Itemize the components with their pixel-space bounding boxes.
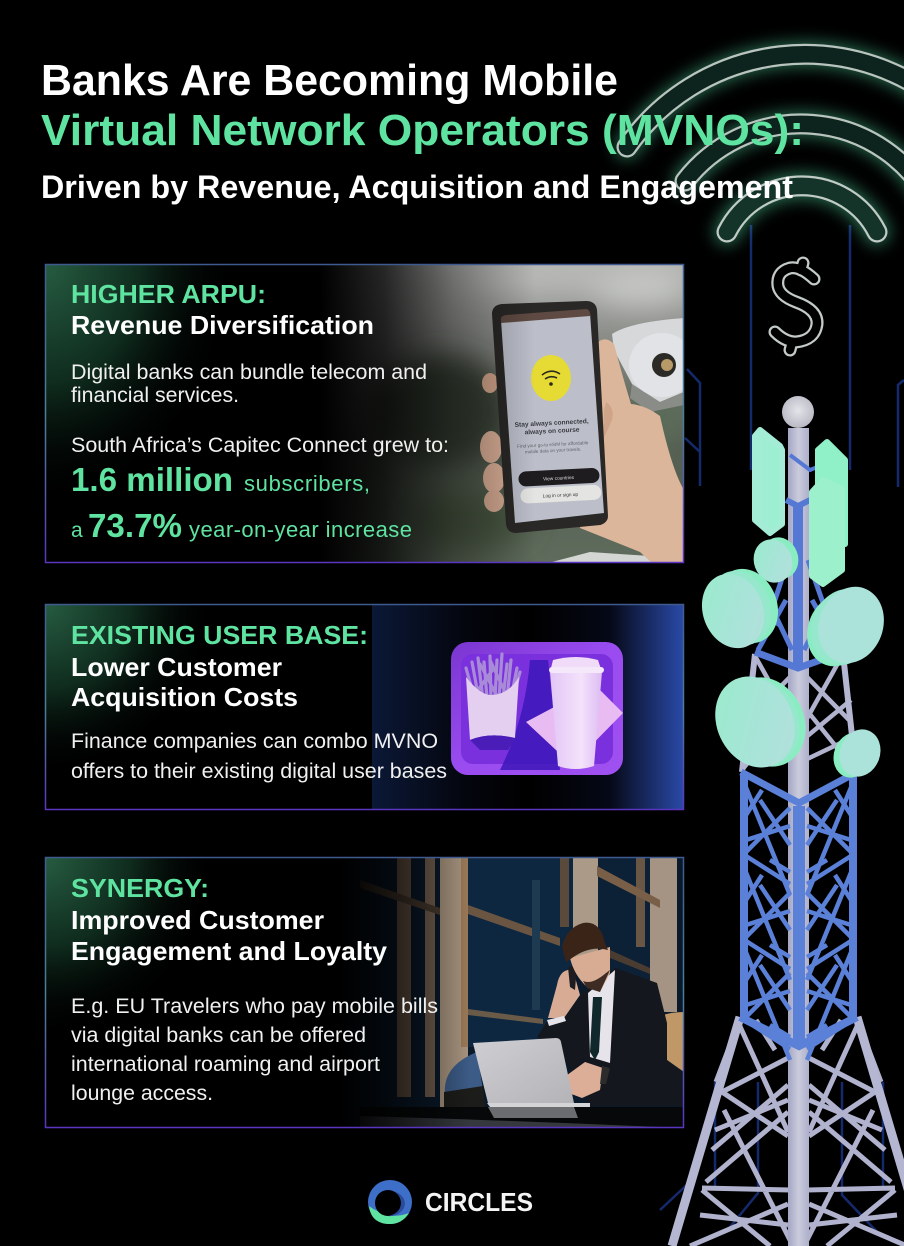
- panel text: Improved Customer: [71, 905, 324, 935]
- mast: [788, 428, 809, 1246]
- panel text: HIGHER ARPU:: [71, 279, 266, 309]
- panel text: subscribers,: [244, 471, 370, 496]
- napkin: [526, 688, 623, 765]
- phone: [495, 304, 605, 530]
- panel text: lounge access.: [71, 1082, 213, 1105]
- panel: existing user base: [45, 604, 684, 810]
- logo: [368, 1180, 533, 1224]
- blue upper bracing: [755, 455, 843, 669]
- hand: [568, 1062, 602, 1098]
- panel text: EXISTING USER BASE:: [71, 620, 368, 650]
- phone wifi icon: [531, 355, 571, 401]
- phone screen copy: Log in or sign up: [543, 492, 579, 500]
- tie: [590, 997, 602, 1060]
- glow layer: [627, 54, 904, 232]
- cup: [550, 672, 602, 769]
- panel text: offers to their existing digital user bases: [71, 760, 447, 783]
- railing: [552, 552, 651, 562]
- lower gray lattice: [672, 1017, 904, 1246]
- fries box: [466, 677, 519, 740]
- panel text: financial services.: [71, 384, 239, 407]
- wifi neon arcs: [627, 54, 904, 232]
- jacket: [537, 968, 684, 1106]
- outer arc: [627, 54, 904, 147]
- hand: [480, 339, 684, 563]
- panel: higher ARPU: [45, 263, 695, 563]
- cell tower: [672, 396, 904, 1246]
- title: Banks Are Becoming Mobile: [41, 56, 618, 105]
- viewer: [612, 318, 683, 412]
- panel text: year-on-year increase: [189, 517, 412, 542]
- raised arm: [548, 970, 580, 1018]
- large lower disc: [701, 663, 820, 781]
- right disc: [797, 577, 894, 675]
- top ball: [782, 396, 814, 428]
- laptop: [473, 1038, 574, 1103]
- panel text: [71, 279, 449, 544]
- panel text: Engagement and Loyalty: [71, 936, 388, 966]
- title: Driven by Revenue, Acquisition and Engagement: [41, 169, 793, 205]
- hair: [562, 923, 608, 962]
- phone screen copy: mobile data on your travels.: [525, 446, 581, 454]
- panel text: international roaming and airport: [71, 1053, 380, 1076]
- logo mark: [368, 1180, 412, 1224]
- tray illustration: [451, 642, 623, 775]
- panel text: [71, 620, 447, 783]
- panel: synergy: [45, 857, 684, 1128]
- man: [537, 923, 684, 1106]
- panel text: via digital banks can be offered: [71, 1024, 366, 1047]
- faint blue circuit lines: [660, 225, 904, 1235]
- photo: hand holding phone: [320, 263, 695, 563]
- middle arc: [685, 124, 904, 200]
- jeans: [444, 1052, 482, 1092]
- upper gray lattice: [742, 654, 856, 772]
- panel text: Finance companies can combo MVNO: [71, 730, 438, 753]
- panel text: 73.7%: [88, 507, 182, 544]
- phone screen copy: Find your go-to eSIM for affordable: [517, 440, 589, 449]
- title: [41, 56, 804, 205]
- panel text: SYNERGY:: [71, 873, 209, 903]
- panel text: Acquisition Costs: [71, 682, 298, 712]
- title: Virtual Network Operators (MVNOs):: [41, 106, 804, 155]
- face: [570, 947, 610, 992]
- columns and beams: [360, 857, 677, 1107]
- sofa: [664, 1012, 683, 1072]
- phone screen copy: View countries: [543, 475, 575, 483]
- photo: businessman with laptop: [340, 857, 684, 1128]
- left disc: [692, 560, 788, 657]
- icon: neon dollar sign: [775, 263, 817, 350]
- antenna discs: [692, 532, 894, 783]
- phone screen copy: Stay always connected,: [515, 418, 589, 429]
- panel text: 1.6 million: [71, 461, 233, 498]
- small upper disc: [748, 532, 804, 588]
- panel text: South Africa’s Capitec Connect grew to:: [71, 434, 449, 457]
- panel text: [71, 873, 438, 1105]
- panel text: Lower Customer: [71, 652, 282, 682]
- shirt: [588, 970, 615, 1063]
- table: [360, 1107, 684, 1128]
- panel text: Digital banks can bundle telecom and: [71, 361, 427, 384]
- fries: [466, 654, 520, 700]
- small right disc: [827, 724, 887, 783]
- logo: CIRCLES: [425, 1187, 533, 1217]
- phone screen copy: [515, 418, 602, 504]
- panel text: E.g. EU Travelers who pay mobile bills: [71, 995, 438, 1018]
- inner arc: [727, 186, 877, 232]
- panel text: Revenue Diversification: [71, 310, 374, 340]
- blue lattice box: [740, 772, 857, 1060]
- phone screen copy: always on course: [524, 427, 580, 436]
- antenna panels: [755, 430, 845, 584]
- phone at ear: [568, 966, 577, 990]
- panel text: a: [71, 519, 83, 542]
